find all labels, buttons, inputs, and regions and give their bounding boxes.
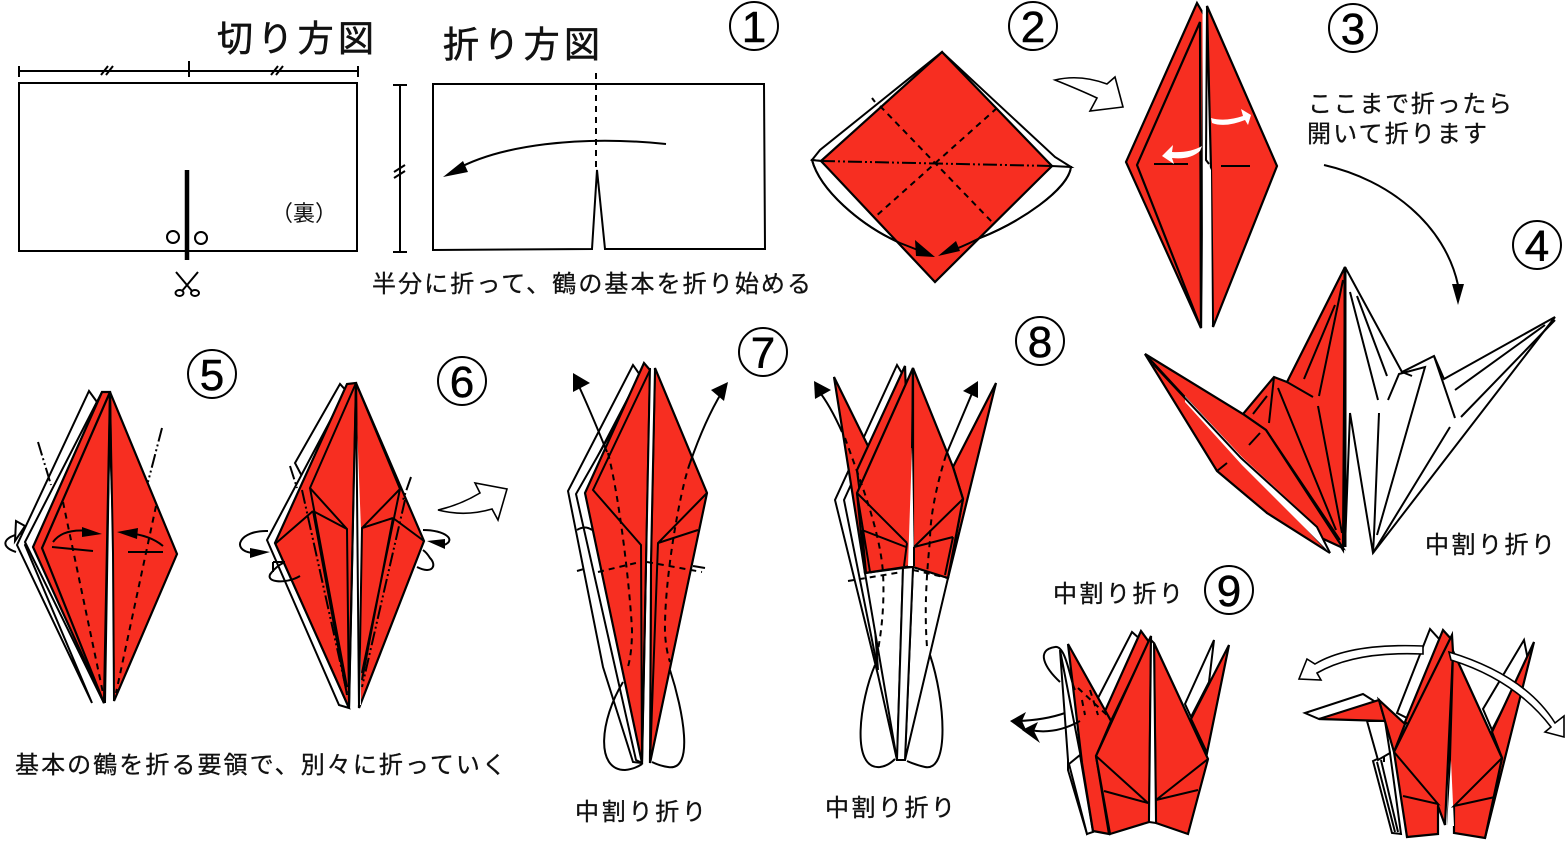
- red head: [1319, 700, 1385, 721]
- caption: step 1: 半分に折って、鶴の基本を折り始める: [372, 271, 811, 298]
- chain lines: [38, 428, 162, 485]
- white back layer upper: [295, 384, 350, 482]
- loop left: [861, 665, 895, 767]
- white bottom flaps: [812, 160, 900, 243]
- lower white left: [865, 568, 903, 760]
- white back peak: [1098, 632, 1141, 711]
- fold lines: [1096, 756, 1208, 803]
- red right wing: [1485, 642, 1534, 838]
- caption: inside reverse fold: 中割り折り: [1425, 532, 1555, 559]
- white bottom flap right: [980, 166, 1071, 238]
- arrows left: [1010, 712, 1080, 743]
- dashed folds: [1078, 688, 1110, 718]
- white half: [1345, 267, 1555, 553]
- text: step 3 note: ここまで折ったら: [1308, 91, 1512, 118]
- white arrow left: [1299, 646, 1423, 680]
- white back layer lower: [267, 395, 349, 708]
- paper rectangle: [19, 83, 357, 251]
- loop right: [652, 670, 684, 767]
- red center left: [1096, 636, 1151, 834]
- dashed fold curves: [608, 453, 690, 670]
- red neck: [1379, 700, 1405, 752]
- paper with slit: [433, 84, 765, 250]
- panel: step 3 kite: [1126, 3, 1277, 328]
- cut line circles: [167, 231, 207, 244]
- red square: [821, 52, 1052, 282]
- center slit: [351, 398, 361, 706]
- heading: folding diagram: 折り方図: [443, 24, 600, 65]
- number 9: 9: [1217, 567, 1241, 616]
- rotation arrow right: [423, 530, 449, 549]
- number 1: 1: [742, 3, 766, 52]
- text: step 3 note: 開いて折ります: [1307, 121, 1487, 148]
- horizontal marks: [1154, 164, 1250, 166]
- white back layers: [835, 365, 903, 760]
- white back peak: [1397, 629, 1440, 718]
- red body: [1243, 267, 1345, 550]
- number 1: [730, 2, 778, 52]
- panel: step 7: [568, 363, 728, 826]
- dimension line: height: [393, 85, 407, 252]
- caption: step 7: 中割り折り: [575, 799, 706, 826]
- red left flap: [275, 383, 356, 708]
- red right wing: [948, 383, 996, 578]
- panel: step 2 square base: [812, 52, 1071, 282]
- white left strip: [1060, 650, 1093, 834]
- number 4: [1513, 221, 1561, 271]
- number 8: 8: [1028, 318, 1052, 367]
- white arrow: right: [1211, 109, 1251, 125]
- red back peak: [1405, 630, 1452, 730]
- red back layer: [33, 392, 110, 703]
- caption: steps 5 and 6: 基本の鶴を折る要領で、別々に折っていく: [15, 752, 506, 779]
- white right wing: [1483, 640, 1528, 730]
- loop left: [604, 682, 642, 770]
- fold line: [595, 73, 597, 170]
- white middle layer: [844, 366, 905, 670]
- fold arrow: [443, 141, 666, 177]
- number 7: 7: [751, 329, 775, 378]
- fold arrow right: [117, 528, 163, 546]
- white arrow: left: [1162, 145, 1202, 164]
- chain lines: [290, 466, 411, 693]
- arrow: step 6 to 7: [438, 483, 507, 520]
- cut line: [185, 170, 189, 260]
- red right flap: [110, 392, 177, 701]
- number 9: [1205, 566, 1253, 616]
- center strip: [1149, 640, 1156, 823]
- red center left: [1394, 635, 1453, 837]
- panel: step 1 folding diagram: [372, 73, 811, 298]
- panel: step 8: [814, 365, 996, 822]
- red back peak: [1105, 631, 1149, 721]
- fold arrow left: [53, 527, 102, 542]
- white side stack: [1069, 755, 1093, 834]
- white right wing: [1185, 640, 1214, 717]
- panel: step 4 open crane: [1145, 267, 1555, 559]
- fold lines: [1394, 752, 1502, 822]
- white arrow right: [1449, 652, 1564, 737]
- red left wing: [1145, 354, 1343, 553]
- red left wing: [1068, 644, 1111, 834]
- arrow up right: [690, 382, 728, 463]
- panel: step 9 left crane: [1010, 631, 1229, 834]
- rotation arrow lower left: [270, 562, 300, 581]
- center slit: [1447, 760, 1454, 826]
- rotation loop: [1044, 647, 1075, 690]
- bottom arrows: [812, 160, 1071, 257]
- right flap: [1207, 6, 1277, 327]
- number 3: [1329, 4, 1377, 54]
- red center right: [913, 368, 963, 578]
- panel: step 6: [240, 383, 449, 708]
- dimension line: width: [19, 61, 358, 77]
- center line: [1344, 267, 1346, 547]
- number 3: 3: [1341, 5, 1365, 54]
- text: step 3 note: [1307, 91, 1512, 148]
- fold lines: [577, 370, 707, 763]
- fold lines right: [356, 383, 424, 707]
- fold lines: [857, 493, 963, 575]
- white neck: [1367, 721, 1390, 760]
- white beak: [1305, 694, 1385, 720]
- arrow up right: [946, 381, 978, 455]
- white back layer inner: [576, 375, 644, 763]
- loop right: [907, 655, 942, 767]
- center slit: [1202, 8, 1212, 325]
- rotation arrow left: [240, 531, 270, 558]
- dashed cross fold: [848, 570, 948, 581]
- chain fold: [821, 161, 1052, 166]
- red center right: [1448, 651, 1502, 838]
- panel: step 9 right crane: [1299, 629, 1564, 838]
- number 8: [1016, 317, 1064, 367]
- number 5: [188, 350, 236, 400]
- number 2: 2: [1021, 3, 1045, 52]
- fold lines left: [275, 383, 356, 707]
- dashed folds: [63, 502, 156, 693]
- arrow up left: [573, 373, 607, 452]
- white back layer outer: [568, 365, 642, 763]
- panel: cutting diagram: [19, 61, 358, 296]
- lower white right: [905, 567, 948, 760]
- caption: step 9: 中割り折り: [1053, 581, 1183, 608]
- white side stack: [1373, 753, 1401, 834]
- center slit: [644, 370, 655, 762]
- arrow: step 3 to 4: [1324, 165, 1464, 305]
- number 6: 6: [450, 358, 474, 407]
- tick mark: [872, 98, 875, 102]
- red right flap: [356, 383, 424, 708]
- reverse side label: （裏）: [271, 201, 337, 226]
- number 4: 4: [1525, 222, 1549, 271]
- red right flap: [650, 368, 707, 763]
- number 7: [739, 328, 787, 378]
- red center left: [857, 368, 913, 573]
- red left wing: [834, 377, 872, 573]
- white middle layer: [25, 392, 104, 703]
- red center right: [1154, 643, 1208, 834]
- small rotation arrow: [5, 521, 28, 552]
- heading: cutting diagram: 切り方図: [217, 18, 374, 59]
- back red layer: [1126, 3, 1204, 328]
- horizontal marks: [52, 547, 163, 552]
- center slit: [105, 467, 115, 702]
- rotation arrow lower right: [417, 550, 433, 570]
- icon: scissors: [176, 272, 199, 296]
- white back layers: [17, 391, 97, 703]
- lower white centre strip: [897, 567, 913, 760]
- arrow: step 2 to 3: [1055, 77, 1123, 111]
- dashed cross folds: [577, 562, 702, 572]
- dashed folds: [875, 106, 997, 222]
- red left flap: [42, 392, 110, 703]
- front left flap: [1137, 22, 1201, 328]
- white back layers: [812, 52, 945, 161]
- white back layer right: [942, 52, 1071, 167]
- center slit: [908, 448, 914, 566]
- red left back layer: [857, 366, 912, 572]
- caption: step 8: 中割り折り: [825, 795, 955, 822]
- panel: step 5: [5, 391, 177, 703]
- number 2: [1009, 2, 1057, 52]
- arrow up left: [814, 381, 842, 432]
- dashed fold curves: [845, 438, 946, 655]
- red left flap: [585, 363, 650, 763]
- number 5: 5: [200, 351, 224, 400]
- number 6: [438, 357, 486, 407]
- red right wing: [1191, 645, 1229, 753]
